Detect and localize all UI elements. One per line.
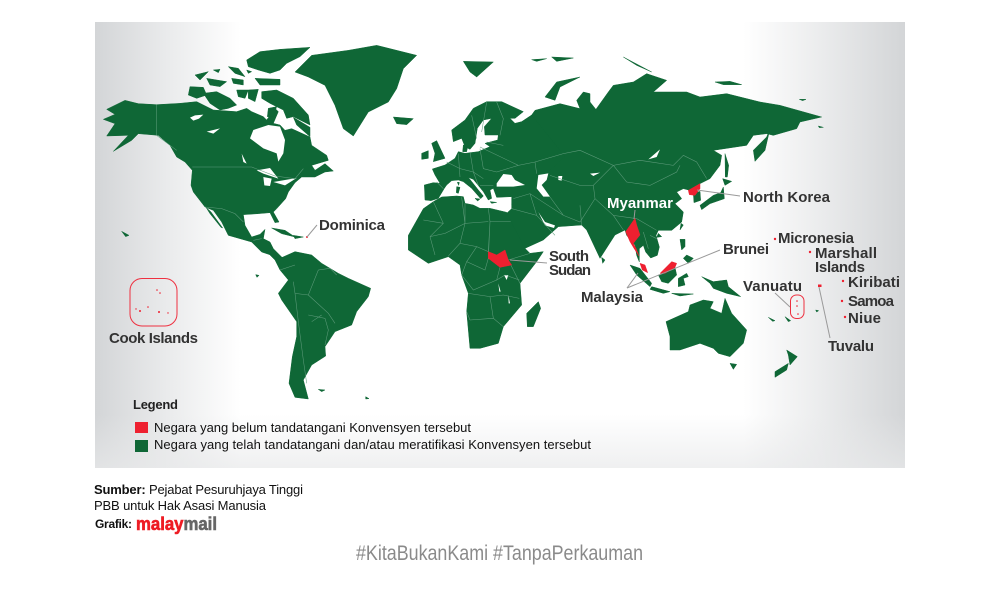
inland seas: Black Sea, Caspian, lakes [497, 173, 562, 197]
source credit [94, 482, 303, 513]
label: North Korea: North Korea [743, 189, 831, 206]
label: South Sudan: South [549, 248, 589, 265]
label: Brunei: Brunei [723, 241, 769, 258]
legend swatch: green [135, 440, 148, 452]
graphic credit with malaymail logo: malaymail [136, 514, 217, 534]
legend [133, 397, 591, 452]
label: Vanuatu: Vanuatu [743, 278, 802, 295]
land: Africa, Australia and Southeast Asia islands [408, 196, 819, 377]
label: Marshall Islands: Islands [815, 259, 865, 276]
country: Myanmar (red) [626, 218, 640, 256]
label: Kiribati: Kiribati [848, 274, 900, 291]
label: South Sudan [549, 248, 591, 279]
leader lines [307, 190, 830, 338]
legend text: not signed: Negara yang belum tandatangani Konvensyen tersebut [154, 420, 471, 435]
land: Asia [463, 57, 823, 262]
map labels [109, 189, 900, 355]
inland water: Hudson Bay and lakes [190, 115, 297, 186]
land: South America [256, 250, 371, 399]
label: Tuvalu: Tuvalu [828, 338, 874, 355]
country: South Sudan (red) [488, 250, 512, 267]
label: South Sudan: Sudan [549, 262, 591, 279]
label: Micronesia: Micronesia [778, 230, 855, 247]
world map [103, 45, 823, 399]
markers: small island states (red) [135, 236, 846, 318]
label: Samoa: Samoa [848, 293, 895, 310]
source credit: Sumber: Pejabat Pesuruhjaya Tinggi [94, 482, 303, 497]
legend title: Legend [133, 397, 178, 412]
red countries: South Sudan, Myanmar, Malaysia and Brunei [488, 218, 677, 273]
highlight box: Vanuatu [790, 295, 804, 318]
land: North America and Greenland [103, 45, 417, 264]
highlight box: Cook Islands [130, 278, 177, 326]
country: North Korea (red) [688, 184, 700, 195]
Asia details: inland water and borders [437, 102, 707, 249]
graphic credit with malaymail logo: Grafik: [95, 517, 132, 531]
label: Cook Islands: Cook Islands [109, 330, 198, 347]
label: Niue: Niue [848, 310, 881, 327]
label: Marshall Islands [815, 245, 877, 276]
label: Myanmar: Myanmar [607, 195, 673, 212]
label: Dominica: Dominica [319, 217, 386, 234]
land: Europe [422, 102, 565, 205]
graphic credit with malaymail logo [95, 514, 217, 534]
hashtags: #KitaBukanKami #TanpaPerkauman [356, 542, 643, 565]
inland lakes of East Africa [498, 275, 510, 303]
land: Canadian Arctic islands [188, 47, 310, 137]
label: Malaysia: Malaysia [581, 289, 644, 306]
country: Malaysia and Brunei (red) [640, 262, 677, 273]
map panel background [95, 22, 905, 468]
label: Marshall Islands: Marshall [815, 245, 877, 262]
source credit: PBB untuk Hak Asasi Manusia [94, 498, 267, 513]
legend swatch: red [135, 422, 148, 433]
legend text: signed: Negara yang telah tandatangani dan/atau meratifikasi Konvensyen tersebut [154, 437, 591, 452]
